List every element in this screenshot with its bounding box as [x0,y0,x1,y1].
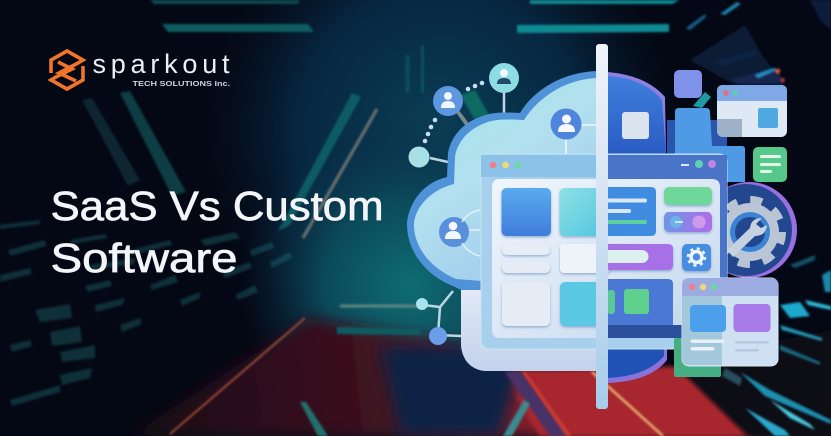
icon: user node in cloud [550,108,597,156]
small glass window [682,278,778,366]
speed streaks right [722,255,831,436]
tagline: TECH SOLUTIONS Inc. [132,79,230,88]
icon: user node [433,86,463,116]
wordmark: sparkout [92,49,230,79]
icon: gear and wrench [700,182,797,278]
green card [674,338,721,377]
icon: floating browser [717,85,787,137]
top-right structure [686,0,831,85]
speed streaks left [0,220,292,406]
illustration: cloud software [407,44,797,409]
lower blue panel [607,279,673,325]
green button [664,187,712,205]
icon: purple square [674,70,702,98]
cloud right half [607,72,666,154]
folder block [667,108,745,182]
window [481,154,727,349]
window dots left [490,162,521,168]
window controls right [681,160,716,168]
icon: user node lower [439,210,480,256]
tile: blue [502,188,551,236]
divider bar [596,44,608,409]
icon: orange hexagon S [51,51,83,89]
cloud left half [407,71,597,371]
tile: teal lower [560,282,610,326]
logo [51,49,230,89]
tile: teal [560,188,610,236]
title [50,183,384,281]
light stripes [82,0,680,436]
tile: light [560,244,610,273]
title: Software [50,235,238,281]
right blue panel [607,187,656,236]
icon: square tile [622,112,649,139]
connector nodes [408,63,519,345]
gear button [682,244,711,271]
tile: light large [502,282,550,326]
purple bar [607,244,673,270]
floor: red glow [130,318,770,436]
icon: green note [753,147,787,182]
toggle [664,212,712,232]
icon: user node teal [489,63,519,93]
pills [502,244,550,273]
title: SaaS Vs Custom [50,183,384,229]
inner panel [492,179,720,338]
